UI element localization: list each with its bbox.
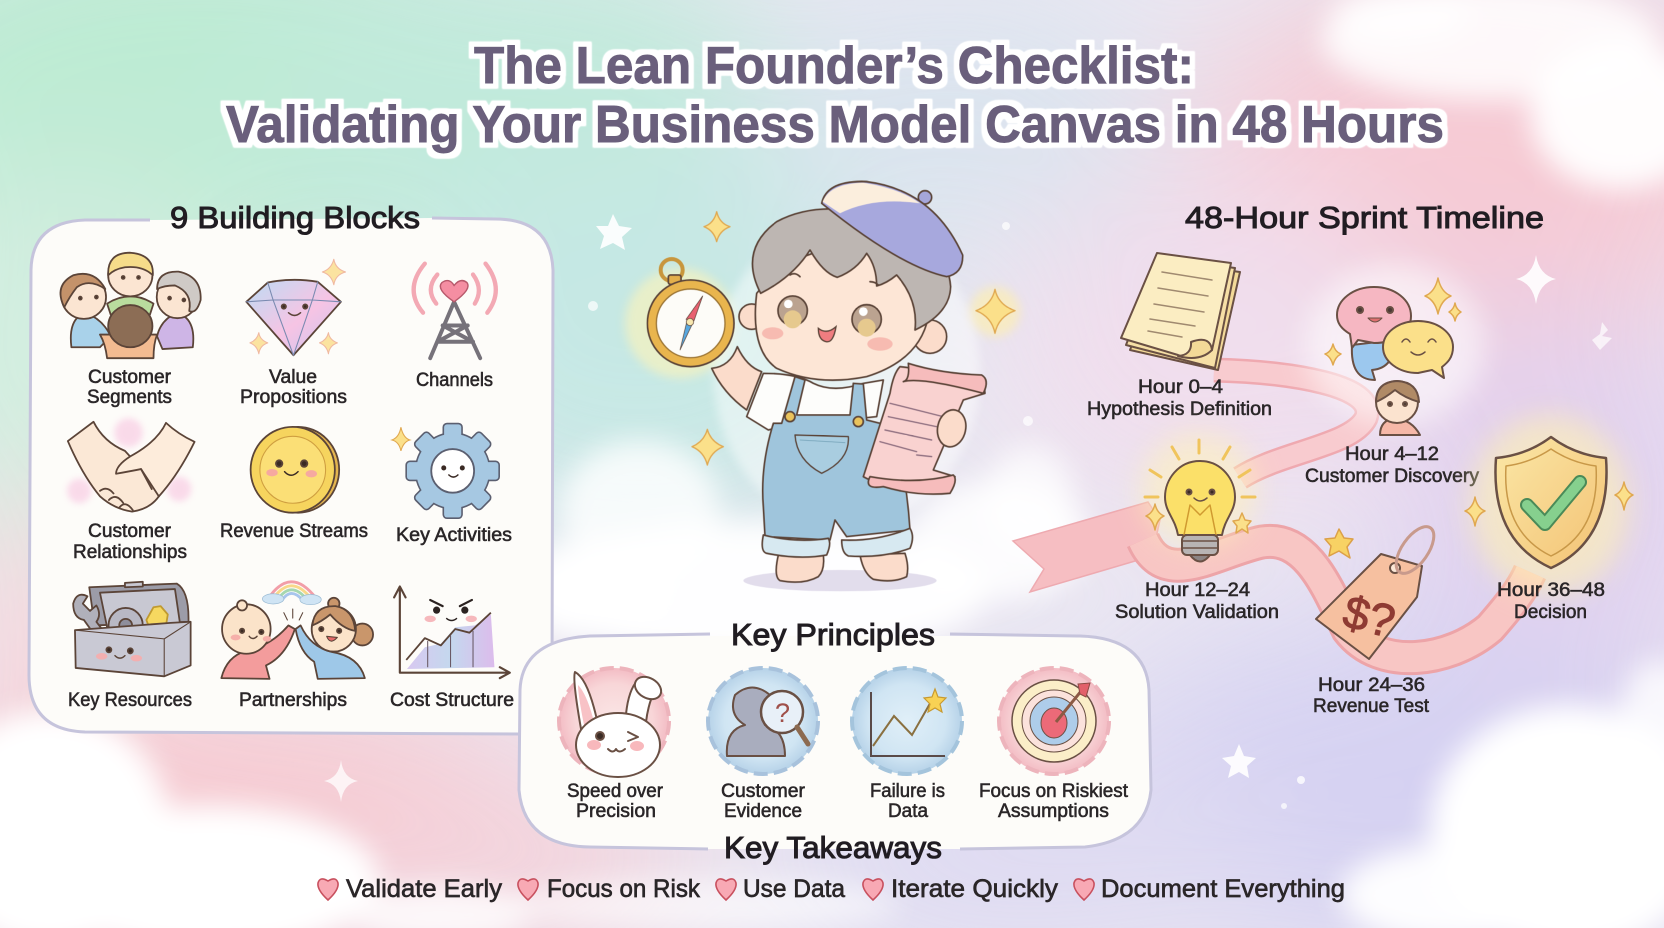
heading: 9 building blocks: 9 Building Blocks (170, 200, 420, 235)
takeaway: validate early: Validate Early (346, 875, 502, 903)
panel: key principles (519, 617, 1151, 849)
label: speed over precision: Precision (576, 801, 656, 822)
label: focus on riskiest assumptions: Assumptions (998, 801, 1109, 822)
decorative stars (324, 214, 1612, 809)
icon: notes (1121, 253, 1240, 370)
icon: failure is data badge (852, 668, 962, 774)
icon: customer evidence badge (708, 668, 818, 774)
panel background (29, 218, 553, 734)
timeline: hour 0-4 hypothesis definition (1087, 253, 1272, 420)
face (762, 274, 893, 351)
glows and shadow (625, 220, 1020, 527)
icon: customer segments (60, 253, 201, 358)
label: value propositions: Value (269, 367, 317, 388)
timeline: hour 4-12 customer discovery (1305, 265, 1485, 487)
scroll (863, 363, 986, 494)
icon: price tag (1316, 520, 1441, 659)
icon: rabbit badge (559, 668, 669, 777)
icon: revenue coin (251, 427, 339, 513)
label: focus on riskiest assumptions (979, 781, 1129, 822)
label: speed over precision: Speed over (567, 781, 664, 802)
label: failure is data: Failure is (870, 781, 945, 802)
label: hypothesis definition: Hypothesis Definition (1087, 399, 1272, 420)
compass (647, 259, 734, 367)
label: customer relationships (73, 521, 187, 563)
section: key takeaways (318, 830, 1345, 903)
icon: channels tower (414, 264, 496, 358)
label: revenue test: Revenue Test (1313, 696, 1430, 717)
label: failure is data: Data (888, 801, 928, 822)
heading: 48-hour sprint timeline: 48-Hour Sprint Timeline (1185, 200, 1544, 235)
icon: bulb rays (1145, 440, 1255, 497)
label: key activities: Key Activities (396, 525, 512, 546)
label: cost structure: Cost Structure (390, 690, 514, 711)
timeline: hour 12-24 solution validation (1115, 432, 1279, 623)
timeline: hour 36-48 decision (1465, 415, 1633, 623)
beret (822, 182, 963, 277)
label: solution validation: Solution Validation (1115, 602, 1279, 623)
heading: key takeaways: Key Takeaways (724, 830, 942, 865)
icon: value propositions diamond (246, 259, 346, 355)
takeaway: use data: Use Data (743, 875, 845, 903)
label: customer segments: Customer (88, 367, 172, 388)
label: customer discovery: Customer Discovery (1305, 466, 1479, 487)
icon: partnerships high five (221, 582, 373, 679)
label: decision: Decision (1514, 602, 1587, 623)
icon: chat bubbles and person (1337, 287, 1453, 435)
title: The Lean Founder’s Checklist: (474, 37, 1194, 95)
label: hour 36-48: Hour 36–48 (1497, 580, 1605, 601)
label: hour 12-24: Hour 12–24 (1145, 580, 1250, 601)
sparkles (692, 212, 1015, 465)
timeline: hour 24-36 revenue test (1313, 520, 1441, 717)
label: hour 4-12: Hour 4–12 (1345, 444, 1439, 465)
title (226, 37, 1444, 154)
glow (1141, 432, 1257, 548)
label: customer segments: Segments (87, 387, 172, 408)
panel: 9 building blocks (29, 200, 553, 734)
icon: cost structure chart (394, 587, 510, 678)
heading: key principles: Key Principles (731, 617, 935, 652)
label: customer evidence: Customer (721, 781, 806, 802)
takeaway: document everything: Document Everything (1101, 875, 1345, 903)
icon: customer relationships handshake (67, 418, 195, 512)
icon: lightbulb (1165, 461, 1235, 562)
panel background (519, 636, 1151, 849)
label: focus on riskiest assumptions: Focus on Riskiest (979, 781, 1129, 802)
icon: target badge (999, 668, 1109, 774)
label: revenue streams: Revenue Streams (220, 521, 368, 542)
icon: sparkles (1465, 482, 1633, 526)
label: hour 24-36: Hour 24–36 (1318, 675, 1425, 696)
overalls (747, 373, 912, 557)
label: customer relationships: Relationships (73, 542, 187, 563)
label: customer evidence: Evidence (724, 801, 802, 822)
feet (776, 553, 908, 582)
glow (1470, 415, 1630, 595)
character: founder with compass and scroll (625, 182, 1020, 591)
label: speed over precision (567, 781, 664, 822)
label: partnerships: Partnerships (239, 690, 347, 711)
panel outline (519, 634, 1151, 849)
label: customer evidence (721, 781, 806, 822)
icon: sparkles (1325, 278, 1461, 365)
label: failure is data (870, 781, 945, 822)
icons of building blocks (60, 253, 510, 679)
ribbon: timeline path (1013, 370, 1530, 658)
takeaway: iterate quickly: Iterate Quickly (891, 875, 1059, 903)
title: Validating Your Business Model Canvas in 48 Hours (226, 96, 1444, 154)
icon: key resources toolbox (73, 582, 191, 676)
label: value propositions: Propositions (240, 387, 347, 408)
icon: key activities gear (392, 424, 498, 517)
raised arm (712, 347, 762, 410)
icon: shield (1495, 437, 1607, 568)
label: hour 0-4: Hour 0–4 (1138, 377, 1223, 398)
icon: star (1325, 529, 1353, 558)
head (739, 209, 951, 380)
label: channels: Channels (416, 370, 493, 391)
label: customer segments (87, 367, 172, 408)
label: customer relationships: Customer (88, 521, 172, 542)
label: value propositions (240, 367, 347, 408)
label: key resources: Key Resources (68, 690, 192, 711)
takeaway: focus on risk: Focus on Risk (547, 875, 700, 903)
glow (1305, 265, 1485, 425)
icon: price tag: $? (1338, 585, 1400, 648)
icon: small stars (1146, 504, 1251, 533)
icon: customer evidence badge: ? (775, 698, 790, 728)
